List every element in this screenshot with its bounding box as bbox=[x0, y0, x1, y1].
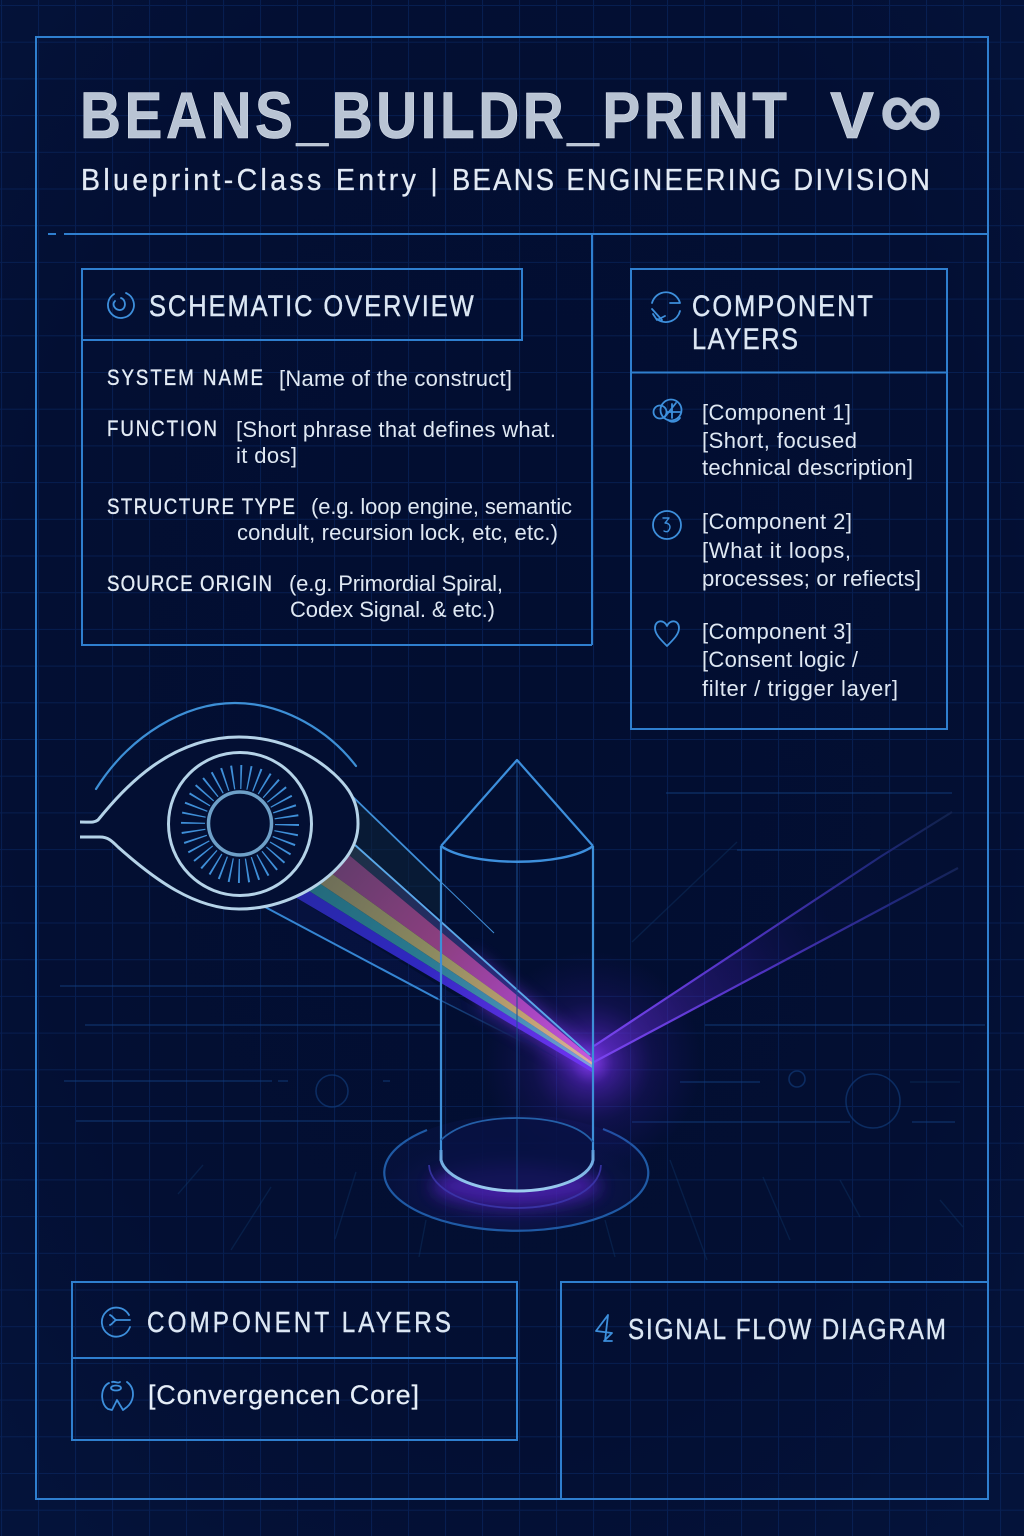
row: structure type: condult, recursion lock, etc, etc.) bbox=[237, 520, 558, 545]
subtitle: BEANS ENGINEERING DIVISION bbox=[452, 163, 930, 197]
row: source origin bbox=[107, 571, 503, 622]
title: BEANS_BUILDR_PRINT bbox=[80, 79, 787, 153]
row: system name: [Name of the construct] bbox=[279, 366, 512, 391]
row: source origin: SOURCE ORIGIN bbox=[107, 573, 272, 596]
title: ∞ bbox=[880, 65, 942, 154]
icon: circle gauge bbox=[102, 1308, 130, 1337]
convergence core label: [Convergencen Core] bbox=[148, 1380, 419, 1410]
component 2 text: [What it loops, bbox=[702, 538, 851, 563]
row: source origin: (e.g. Primordial Spiral, bbox=[289, 571, 503, 596]
title bbox=[80, 65, 942, 154]
component 2 text: processes; or refiects] bbox=[702, 566, 921, 591]
component 3 text: [Consent logic / bbox=[702, 647, 859, 672]
row: function bbox=[107, 417, 556, 468]
component 1 text bbox=[702, 400, 913, 480]
component 2 text bbox=[702, 509, 921, 591]
faint background sketch lines bbox=[60, 793, 985, 1260]
row: system name: SYSTEM NAME bbox=[107, 367, 263, 390]
component 3 text: filter / trigger layer] bbox=[702, 676, 898, 701]
icon: spiral bbox=[108, 293, 134, 318]
row: structure type: (e.g. loop engine, semantic bbox=[311, 494, 572, 519]
component 3 text bbox=[702, 619, 898, 701]
eye bbox=[80, 737, 358, 909]
heading: component layers: LAYERS bbox=[692, 322, 798, 355]
outgoing ray bbox=[594, 812, 958, 1062]
icon: core bbox=[102, 1382, 133, 1410]
heading: component layers bbox=[692, 289, 873, 355]
panel: bottom component layers bbox=[72, 1282, 517, 1440]
subtitle: Blueprint-Class Entry bbox=[81, 163, 416, 197]
icon: heart bbox=[655, 621, 679, 646]
row: system name bbox=[107, 366, 512, 391]
title: V bbox=[830, 78, 874, 152]
icon: cycle bbox=[652, 292, 680, 322]
heading: schematic overview: SCHEMATIC OVERVIEW bbox=[149, 289, 474, 322]
panel: schematic overview bbox=[82, 269, 592, 645]
floor glow and base ellipse bbox=[384, 1115, 648, 1231]
heading: component layers: COMPONENT LAYERS bbox=[147, 1306, 451, 1338]
light beam entering prism bbox=[265, 795, 596, 1078]
row: function: [Short phrase that defines what. bbox=[236, 417, 556, 442]
prism cylinder and cone bbox=[441, 760, 593, 1192]
panel: component layers bbox=[631, 269, 947, 729]
icon: component 2 circle bbox=[653, 511, 681, 539]
row: source origin: Codex Signal. & etc.) bbox=[290, 597, 495, 622]
row: structure type bbox=[107, 494, 572, 545]
icon: signal star bbox=[596, 1315, 612, 1341]
subtitle: | bbox=[430, 162, 438, 197]
component 1 text: technical description] bbox=[702, 455, 913, 480]
row: function: it dos] bbox=[236, 443, 297, 468]
component 3 text: [Component 3] bbox=[702, 619, 852, 644]
row: function: FUNCTION bbox=[107, 418, 217, 441]
row: structure type: STRUCTURE TYPE bbox=[107, 496, 295, 519]
subtitle bbox=[81, 162, 930, 197]
panel: signal flow diagram bbox=[561, 1282, 988, 1499]
heading: component layers: COMPONENT bbox=[692, 289, 873, 322]
heading: signal flow diagram: SIGNAL FLOW DIAGRAM bbox=[628, 1313, 946, 1345]
eyebrow arc bbox=[96, 703, 356, 789]
component 2 text: [Component 2] bbox=[702, 509, 852, 534]
component 1 text: [Short, focused bbox=[702, 428, 857, 453]
component 1 text: [Component 1] bbox=[702, 400, 851, 425]
icon: component 1 cluster bbox=[654, 400, 682, 422]
illustration: prism diagram bbox=[80, 703, 958, 1231]
converging glow bbox=[482, 952, 702, 1172]
